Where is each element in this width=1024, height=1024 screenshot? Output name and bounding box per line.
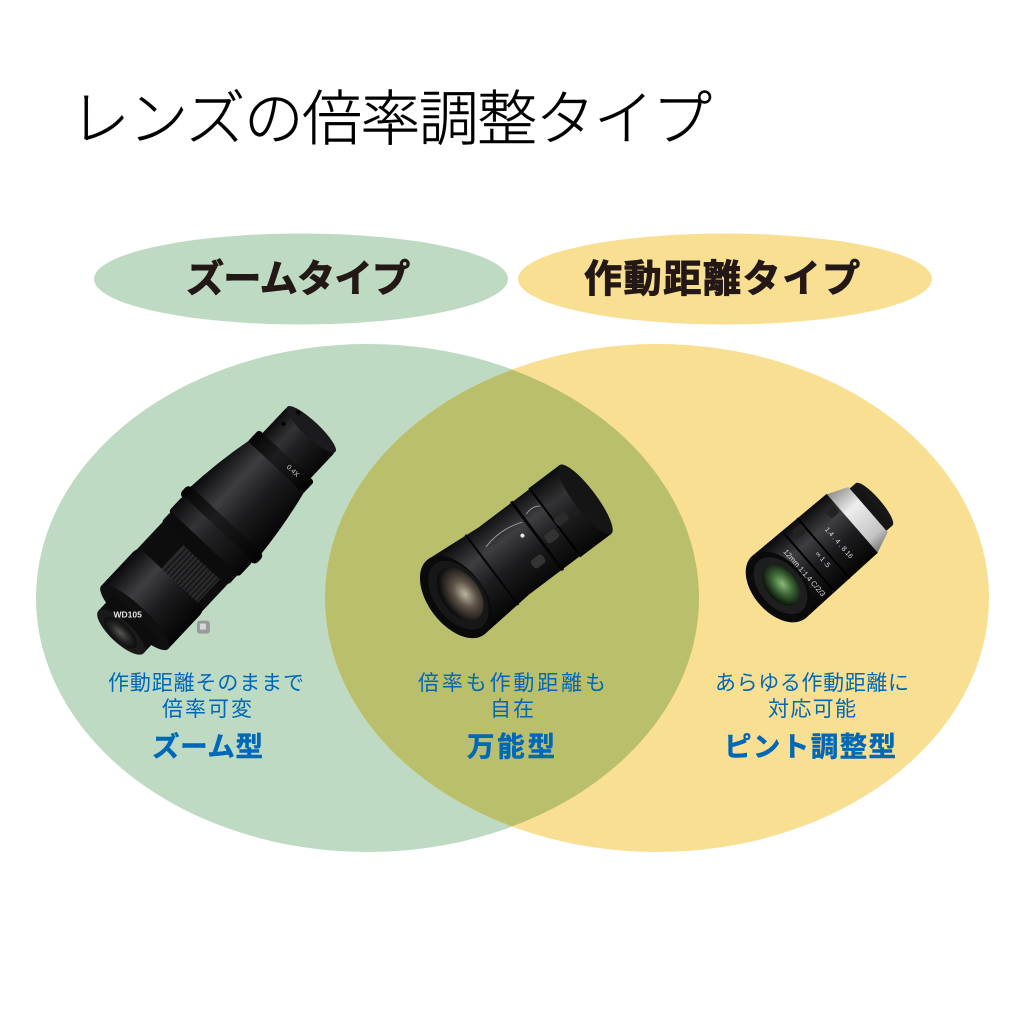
type name: ズーム型 [152,731,263,762]
knurled ring [135,521,229,613]
circle: zoom [36,344,699,852]
description: あらゆる作動距離に [715,672,909,695]
circle: working distance [325,344,989,852]
pill label: working distance type: 作動距離タイプ [584,259,860,301]
pill label: zoom type: ズームタイプ [186,258,410,301]
type name: 万能型 [467,731,555,762]
description line 2: 倍率可変 [162,698,252,721]
lens: zoom type [76,388,365,685]
text block: zoom type [108,672,304,762]
pill: zoom type [94,234,508,324]
type name: ピント調整型 [724,731,896,762]
description line 2: 自在 [490,698,534,721]
venn diagram [36,344,989,852]
overlap [325,370,699,826]
thumb screw [197,621,210,634]
lens: focus adjust type [732,469,906,635]
description: 倍率も作動距離も [418,672,606,695]
lens: zoom type: 0.4X [285,464,300,479]
text block: all-round type [418,672,606,762]
lens: focus adjust type: ∞ 1 .5 [814,551,831,569]
description line 2: 対応可能 [768,698,856,721]
lens: all-round type [405,455,622,651]
lens: focus adjust type: 12mm 1:1.4 C/2/3 [781,547,827,598]
lens: focus adjust type: 1.4 . 4 . 8 16 [823,526,854,560]
title: レンズの倍率調整タイプ [70,86,712,153]
pill: working distance type [518,234,932,324]
description: 作動距離そのままで [108,672,304,695]
text block: focus adjust type [715,672,909,762]
lens: zoom type: WD105 [113,610,142,620]
